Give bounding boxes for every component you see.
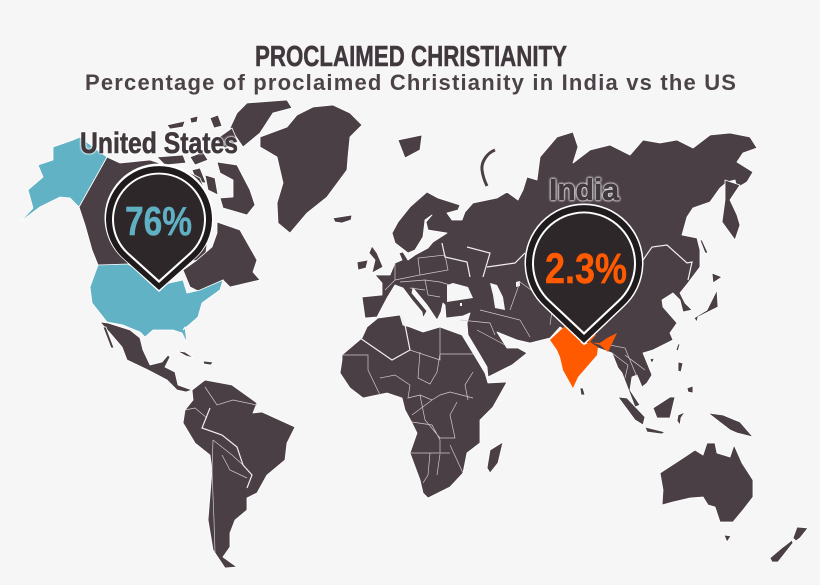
subtitle: Percentage of proclaimed Christianity in India vs the US	[85, 70, 736, 95]
label: India: India	[549, 172, 620, 207]
label: United States: United States	[80, 127, 238, 160]
pin: United States	[104, 163, 214, 292]
pin value: 76%	[125, 198, 192, 244]
highlighted: Alaska	[20, 137, 107, 222]
seas	[447, 281, 520, 310]
world map	[79, 100, 808, 568]
pin: India	[525, 203, 644, 345]
title: PROCLAIMED CHRISTIANITY	[255, 41, 567, 73]
country borders	[185, 255, 645, 553]
Novaya Zemlya	[482, 150, 495, 186]
pin value: 2.3%	[545, 245, 627, 293]
highlighted: contiguous United States	[90, 264, 223, 343]
highlighted: India	[550, 326, 617, 388]
